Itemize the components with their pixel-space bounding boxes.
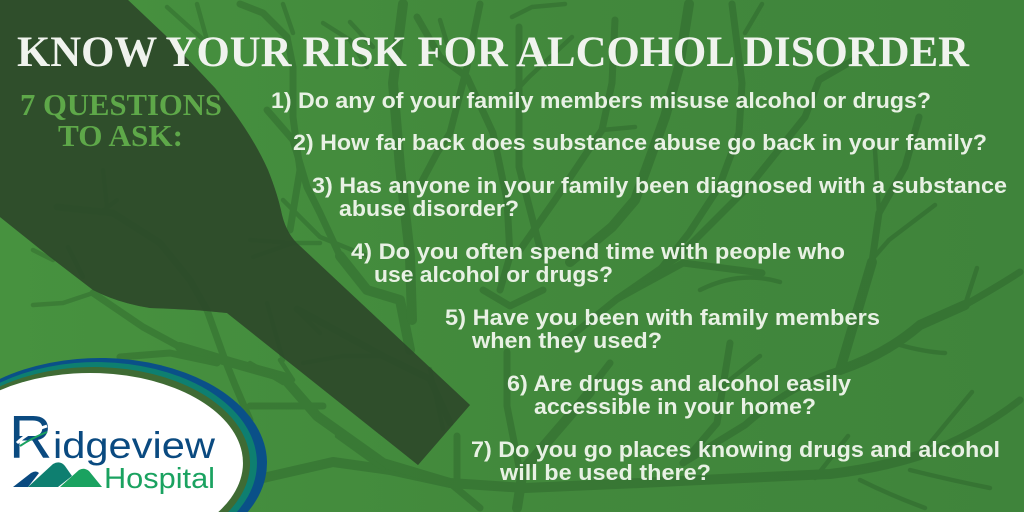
question 4: [351, 239, 845, 287]
question 4: use alcohol or drugs?: [374, 262, 613, 287]
subheading: 7 questions to ask: [20, 87, 222, 153]
question 5: [445, 305, 880, 353]
question 5: when they used?: [471, 328, 662, 353]
question 7: [471, 437, 1000, 485]
question 7: 7) Do you go places knowing drugs and alcohol: [471, 437, 1000, 462]
question 4: 4) Do you often spend time with people who: [351, 239, 845, 264]
bottle tint over branches: [0, 0, 470, 465]
question 6: [507, 371, 852, 419]
title: KNOW YOUR RISK FOR ALCOHOL DISORDER: [17, 28, 970, 76]
branches: thick limbs: [180, 4, 965, 508]
subheading: 7 questions to ask: TO ASK:: [58, 118, 183, 153]
question 2: 2) How far back does substance abuse go back in your family?: [293, 130, 987, 155]
logo wordmark: R: [9, 404, 52, 471]
logo wordmark: idgeview: [53, 425, 215, 466]
question 3: 3) Has anyone in your family been diagnosed with a substance: [312, 173, 1007, 198]
question 6: accessible in your home?: [534, 394, 816, 419]
question 6: 6) Are drugs and alcohol easily: [507, 371, 852, 396]
logo mountains: [13, 462, 102, 487]
question 1: 1) Do any of your family members misuse alcohol or drugs?: [271, 88, 931, 113]
subheading: 7 questions to ask: 7 QUESTIONS: [20, 87, 222, 122]
question 3: abuse disorder?: [339, 196, 519, 221]
question 5: 5) Have you been with family members: [445, 305, 880, 330]
logo wordmark: Hospital: [104, 463, 215, 495]
logo badge: [0, 358, 267, 512]
question 3: [312, 173, 1007, 221]
bottle silhouette: [0, 0, 470, 465]
question 7: will be used there?: [499, 460, 711, 485]
logo wordmark: [9, 404, 215, 495]
